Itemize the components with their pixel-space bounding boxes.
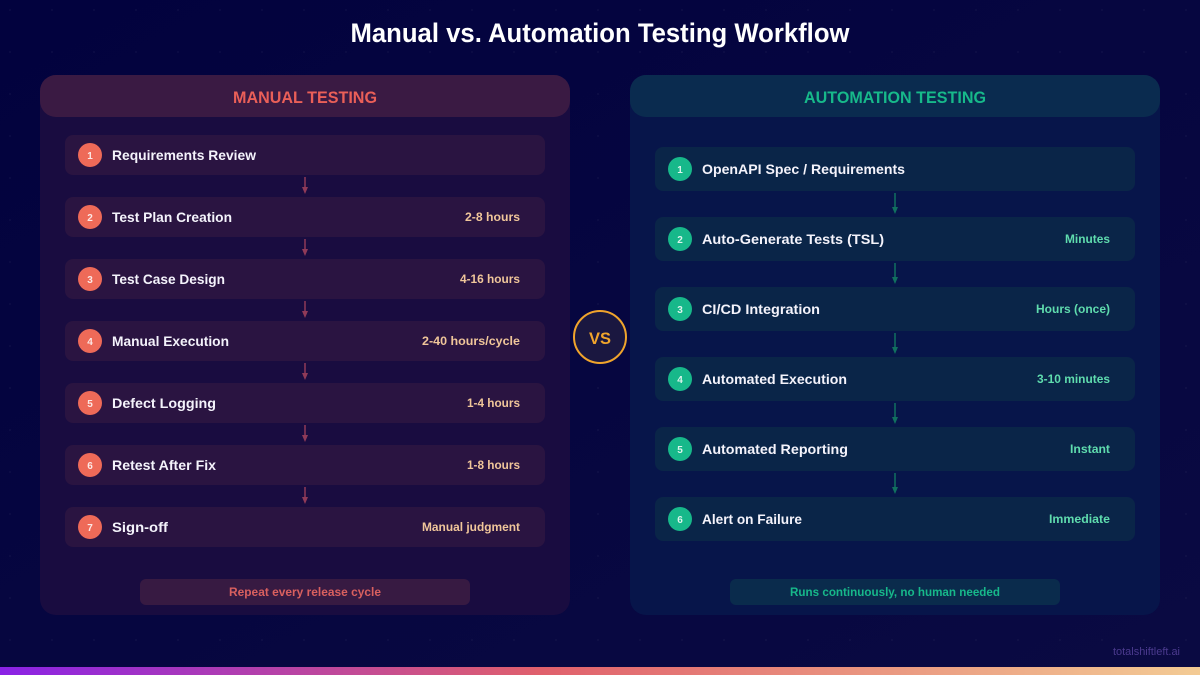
step 3: test case design: 4-16 hours (460, 272, 520, 286)
step 3: ci/cd integration (655, 287, 1135, 331)
arrow 2 to 3 (892, 263, 898, 284)
arrow 3 to 4 (892, 333, 898, 354)
step 1: requirements review: Requirements Review (112, 147, 256, 163)
step 4: automated execution: 3-10 minutes (1037, 372, 1110, 386)
step 6: retest after fix: 1-8 hours (467, 458, 520, 472)
step 5: defect logging: 1-4 hours (467, 396, 520, 410)
automation testing heading (630, 75, 1160, 117)
step 3: ci/cd integration: Hours (once) (1036, 302, 1110, 316)
arrow 6 to 7 (302, 487, 308, 504)
panel: automation testing (630, 75, 1160, 615)
arrow 4 to 5 (302, 363, 308, 380)
step 6: retest after fix (65, 445, 545, 485)
arrow 5 to 6 (892, 473, 898, 494)
step 2: test plan creation: 2-8 hours (465, 210, 520, 224)
callout: runs continuously: Runs continuously, no human needed (790, 585, 1000, 599)
callout: repeat every release cycle: Repeat every release cycle (229, 585, 381, 599)
step 5: automated reporting: Instant (1070, 442, 1110, 456)
watermark: totalshiftleft.ai (1113, 646, 1180, 658)
step 1: openapi spec: OpenAPI Spec / Requirements (702, 161, 905, 177)
step 1: requirements review: 1 (87, 151, 93, 162)
manual testing heading: MANUAL TESTING (233, 89, 377, 107)
step 1: openapi spec: 1 (677, 165, 683, 176)
manual testing heading (40, 75, 570, 117)
arrow 1 to 2 (302, 177, 308, 194)
step 2: auto-generate tests: 2 (677, 235, 683, 246)
step 5: automated reporting: Automated Reporting (702, 441, 848, 457)
step 7: sign-off (65, 507, 545, 547)
arrow 2 to 3 (302, 239, 308, 256)
step 6: alert on failure (655, 497, 1135, 541)
step 4: manual execution: 4 (87, 337, 93, 348)
step 2: test plan creation (65, 197, 545, 237)
step 3: ci/cd integration: 3 (677, 305, 683, 316)
arrow 1 to 2 (892, 193, 898, 214)
step 6: alert on failure: Alert on Failure (702, 511, 802, 527)
step 3: test case design: Test Case Design (112, 271, 225, 287)
callout: repeat every release cycle (140, 579, 470, 605)
step 3: ci/cd integration: CI/CD Integration (702, 301, 820, 317)
vs badge (574, 311, 626, 363)
callout: runs continuously (730, 579, 1060, 605)
step 6: alert on failure: Immediate (1049, 512, 1110, 526)
step 4: manual execution: 2-40 hours/cycle (422, 334, 520, 348)
bottom gradient bar (0, 667, 1200, 675)
step 5: automated reporting (655, 427, 1135, 471)
step 5: defect logging (65, 383, 545, 423)
step 2: auto-generate tests: Auto-Generate Tests (TSL) (702, 231, 884, 247)
step 4: automated execution: 4 (677, 375, 683, 386)
step 6: retest after fix: 6 (87, 461, 93, 472)
automation testing heading: AUTOMATION TESTING (804, 89, 986, 107)
arrow 5 to 6 (302, 425, 308, 442)
step 7: sign-off: Sign-off (112, 519, 168, 535)
step 4: manual execution: Manual Execution (112, 333, 229, 349)
step 6: alert on failure: 6 (677, 515, 683, 526)
step 7: sign-off: 7 (87, 523, 93, 534)
step 5: defect logging: Defect Logging (112, 395, 216, 411)
step 4: manual execution (65, 321, 545, 361)
panel: manual testing (40, 75, 570, 615)
arrow 3 to 4 (302, 301, 308, 318)
step 3: test case design: 3 (87, 275, 93, 286)
step 4: automated execution: Automated Execution (702, 371, 847, 387)
arrow 4 to 5 (892, 403, 898, 424)
step 7: sign-off: Manual judgment (422, 520, 520, 534)
step 1: requirements review (65, 135, 545, 175)
step 3: test case design (65, 259, 545, 299)
step 1: openapi spec (655, 147, 1135, 191)
step 2: test plan creation: 2 (87, 213, 93, 224)
title: Manual vs. Automation Testing Workflow (350, 18, 850, 48)
step 6: retest after fix: Retest After Fix (112, 457, 216, 473)
step 2: auto-generate tests (655, 217, 1135, 261)
step 4: automated execution (655, 357, 1135, 401)
step 2: test plan creation: Test Plan Creation (112, 209, 232, 225)
vs badge: VS (589, 329, 611, 348)
step 5: automated reporting: 5 (677, 445, 683, 456)
step 2: auto-generate tests: Minutes (1065, 232, 1110, 246)
step 5: defect logging: 5 (87, 399, 93, 410)
